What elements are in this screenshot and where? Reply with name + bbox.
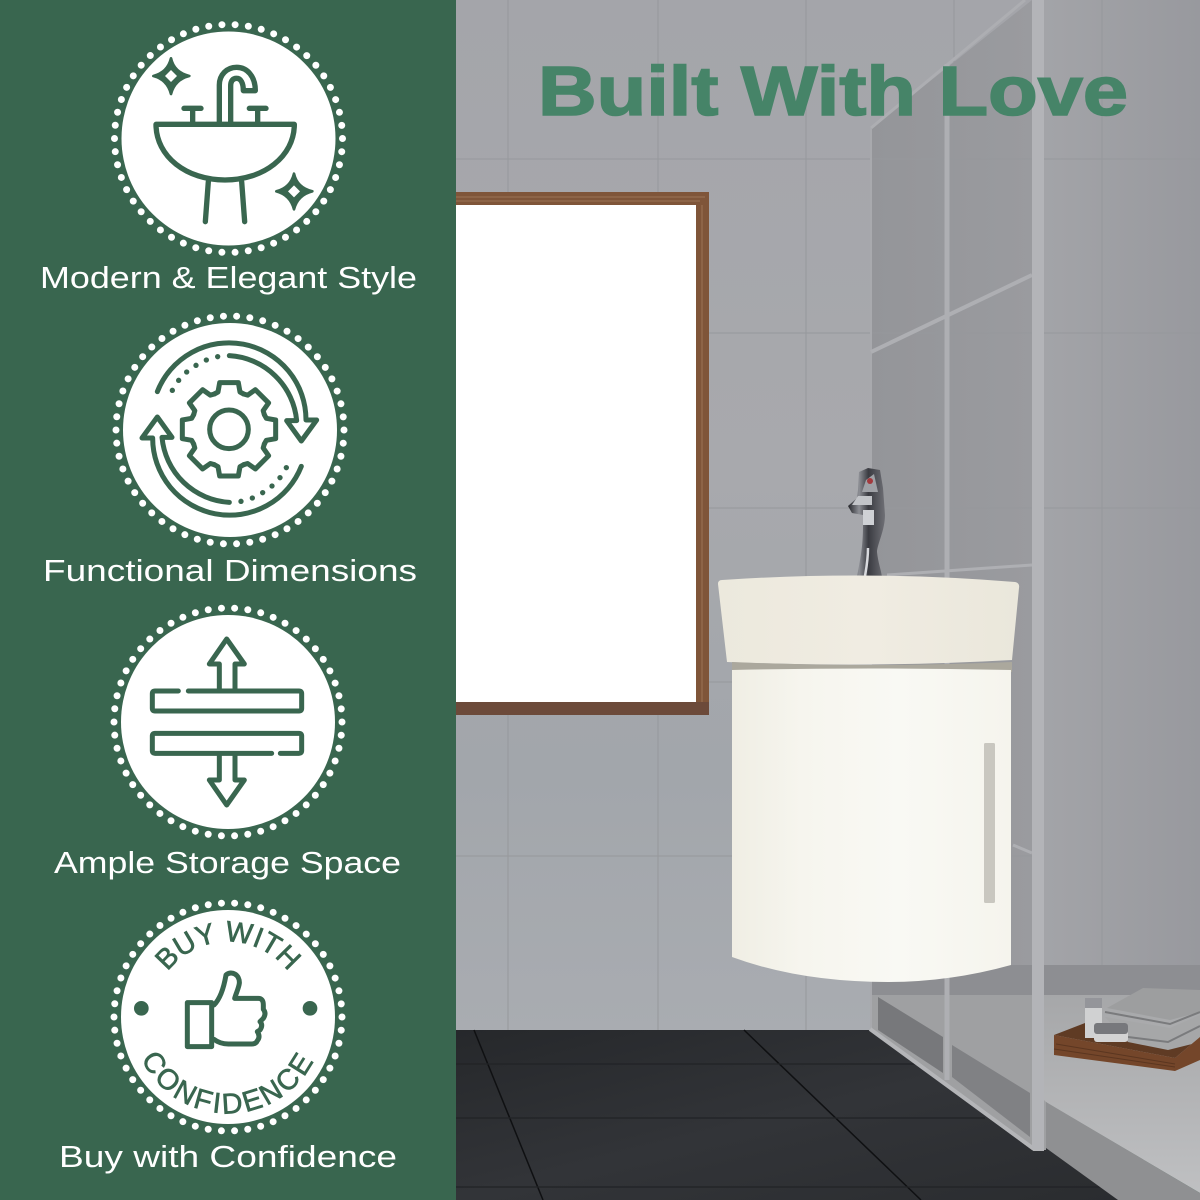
curved text: buy with: BUY WITH xyxy=(154,920,302,970)
mirror frame xyxy=(456,192,709,715)
sidebar background xyxy=(0,0,456,1200)
glass shower frame xyxy=(870,0,1044,1149)
glass reflection panels xyxy=(878,997,943,1073)
wall xyxy=(456,0,1200,1032)
platform front face xyxy=(1046,1102,1200,1200)
icon: shelves with arrows xyxy=(152,639,302,805)
label: Functional Dimensions xyxy=(43,554,417,588)
platform behind glass xyxy=(870,995,1046,1150)
bathroom photo scene xyxy=(456,0,1200,1200)
wall behind glass xyxy=(871,0,1032,1000)
towels tray xyxy=(1054,988,1200,1071)
back wall strip xyxy=(872,965,1200,997)
feature: modern style xyxy=(40,24,417,295)
wall tile joints xyxy=(456,0,1200,1030)
wooden tray front xyxy=(1054,1035,1200,1071)
icon: gear with cycle arrows xyxy=(142,343,317,515)
wall mirror xyxy=(456,192,709,715)
badge: gear xyxy=(116,316,344,544)
cabinet handle xyxy=(984,743,995,903)
mirror glass xyxy=(456,205,696,702)
basin xyxy=(718,575,1019,665)
shower platform xyxy=(870,965,1200,1200)
frame top rail grain xyxy=(456,197,705,702)
panel: features sidebar xyxy=(40,21,417,1174)
title: Built With Love xyxy=(538,52,1128,130)
floor xyxy=(456,1030,1140,1200)
badge: sink xyxy=(114,24,342,252)
curved text: confidence: CONFIDENCE xyxy=(144,1052,314,1114)
gap shadow xyxy=(732,662,1012,672)
label: Modern & Elegant Style xyxy=(40,261,417,295)
label: Ample Storage Space xyxy=(54,846,401,880)
corner vanity xyxy=(718,468,1019,982)
side dots xyxy=(134,1001,317,1016)
frame bottom rail xyxy=(456,702,709,715)
towel stack xyxy=(1105,988,1200,1050)
badge: shelves xyxy=(114,608,342,836)
floor tile joints xyxy=(456,1030,1100,1200)
cabinet xyxy=(732,668,1011,982)
jar xyxy=(1094,1023,1128,1042)
icon: thumbs up xyxy=(187,973,265,1047)
icon: sink with sparkles xyxy=(153,58,312,222)
label: Buy with Confidence xyxy=(59,1140,397,1174)
badge: thumbs up xyxy=(110,900,346,1134)
faucet xyxy=(848,468,885,577)
platform top xyxy=(1044,995,1200,1193)
feature: buy with confidence xyxy=(59,900,397,1174)
feature: storage space xyxy=(54,608,401,880)
bottle xyxy=(1085,998,1102,1038)
feature: functional dimensions xyxy=(43,316,417,588)
tray inside xyxy=(1054,1023,1200,1058)
right wall xyxy=(1044,0,1200,1000)
